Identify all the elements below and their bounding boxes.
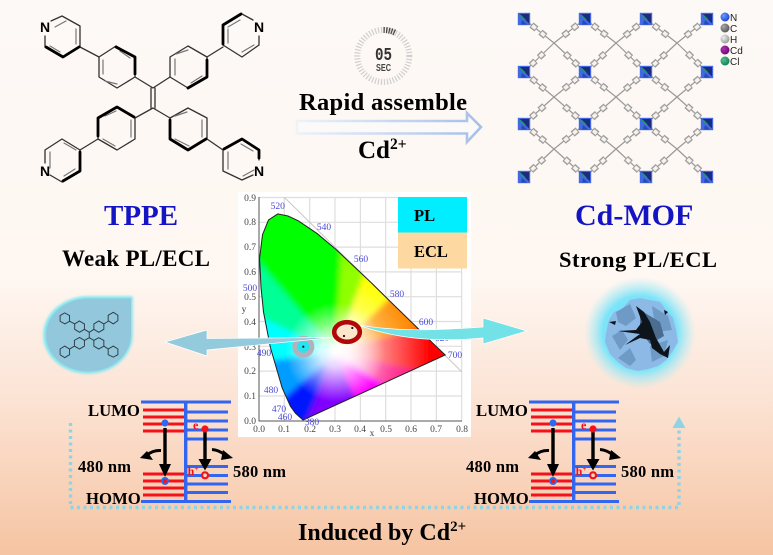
legend: atoms: N	[730, 13, 737, 24]
energy level diagram: Cd-MOF: HOMO	[474, 489, 529, 508]
label: Cd2+ reagent: 2+	[390, 136, 407, 153]
text: strong PL/ECL: Strong PL/ECL	[559, 247, 717, 272]
energy level diagram: Cd-MOF: e	[581, 418, 587, 432]
chart: x axis labels: 0.6	[405, 425, 417, 435]
chart: y axis labels: 0.3	[244, 343, 256, 353]
chart: x axis labels: 0.2	[304, 425, 316, 435]
legend: atoms: C	[730, 24, 737, 35]
icon: timer: 05	[375, 46, 392, 66]
icon: TPPE droplet	[44, 297, 132, 373]
chart: y axis labels: 0.8	[244, 218, 256, 228]
chart: x axis labels: x	[370, 429, 375, 439]
chart: y axis labels	[244, 194, 256, 427]
legend: ECL label: ECL	[414, 242, 448, 261]
caption: induced by Cd2+: Induced by Cd	[298, 520, 450, 546]
chart: x axis labels: 0.1	[278, 425, 290, 435]
energy level diagram: TPPE: +	[194, 465, 198, 473]
chart: wavelength labels: 500	[243, 284, 257, 294]
Cd-MOF framework	[518, 13, 713, 183]
chart: x axis labels: 0.4	[354, 425, 366, 435]
arrow: to Cd-MOF	[358, 318, 527, 344]
energy level diagram: TPPE	[78, 400, 286, 508]
chart: x axis labels	[242, 305, 468, 439]
label: Cd2+ reagent: Cd	[358, 137, 390, 164]
chart: wavelength labels: 540	[317, 223, 331, 233]
icon: timer: SEC	[376, 63, 391, 74]
arrow: to TPPE	[165, 330, 332, 356]
legend: PL label: PL	[414, 206, 435, 225]
legend: PL swatch	[398, 197, 467, 232]
TPPE molecule structure	[40, 14, 264, 182]
chart: wavelength labels: 480	[264, 386, 278, 396]
chart: x axis labels: 0.5	[380, 425, 392, 435]
TPPE molecule structure: N	[40, 163, 50, 179]
chart: x axis labels: 0.8	[456, 425, 468, 435]
energy level diagram: Cd-MOF	[466, 400, 674, 508]
heading: Cd-MOF: Cd-MOF	[575, 199, 693, 232]
energy level diagram: TPPE: 580 nm	[233, 462, 286, 481]
TPPE molecule structure: N	[40, 19, 50, 35]
chart: wavelength labels: 620	[435, 334, 449, 344]
energy level diagram: TPPE: HOMO	[86, 489, 141, 508]
icon: timer	[357, 30, 409, 82]
marker: grey ring TPPE	[295, 338, 312, 355]
chart: x axis labels: y	[242, 305, 247, 315]
chart: wavelength labels: 700	[448, 351, 462, 361]
chart: wavelength labels: 580	[390, 290, 404, 300]
chart: y axis labels: 0.4	[244, 318, 256, 328]
chart: y axis labels: 0.5	[244, 293, 256, 303]
legend: atoms: Cl	[730, 57, 739, 68]
chart: wavelength labels: 490	[257, 349, 271, 359]
chart: wavelength labels: 460	[278, 413, 292, 423]
caption: induced by Cd2+: 2+	[450, 519, 466, 535]
chart: y axis labels: 0.6	[244, 268, 256, 278]
energy level diagram: TPPE: LUMO	[88, 401, 140, 420]
heading: TPPE: TPPE	[104, 200, 178, 232]
legend: atoms: H	[730, 35, 737, 46]
chart: wavelength labels: 600	[419, 318, 433, 328]
chart: wavelength labels: 380	[305, 418, 319, 428]
chart: y axis labels: 0.9	[244, 194, 256, 204]
chart: x axis labels: 0.0	[253, 425, 265, 435]
chart: wavelength labels: 470	[272, 405, 286, 415]
energy level diagram: Cd-MOF: h	[576, 464, 582, 478]
TPPE molecule structure: N	[254, 163, 264, 179]
legend: atoms: Cd	[730, 46, 743, 57]
marker: red ring Cd-MOF	[334, 322, 360, 342]
chart: y axis labels: 0.2	[244, 367, 256, 377]
chart: y axis labels: 0.1	[244, 392, 256, 402]
energy level diagram: Cd-MOF: 580 nm	[621, 462, 674, 481]
energy level diagram: Cd-MOF: LUMO	[476, 401, 528, 420]
TPPE molecule structure: N	[254, 19, 264, 35]
legend: ECL swatch	[398, 232, 467, 268]
icon: Cd-MOF particle with glow	[584, 277, 696, 389]
arrow: rapid assemble	[297, 113, 481, 142]
legend: atoms	[720, 12, 743, 68]
chart: wavelength labels: 520	[271, 202, 285, 212]
chart: colour gamut	[260, 214, 444, 420]
heading: rapid assemble: Rapid assemble	[299, 89, 467, 116]
text: weak PL/ECL: Weak PL/ECL	[62, 246, 210, 271]
energy level diagram: TPPE: e	[193, 418, 199, 432]
chart: wavelength labels	[243, 202, 462, 428]
chart: x axis labels: 0.3	[329, 425, 341, 435]
energy level diagram: TPPE: 480 nm	[78, 457, 131, 476]
chart: y axis labels: 0.0	[244, 417, 256, 427]
chart: x axis labels: 0.7	[430, 425, 442, 435]
arrow: dotted induced path	[70, 416, 686, 508]
chart grid	[259, 197, 462, 421]
energy level diagram: Cd-MOF: 480 nm	[466, 457, 519, 476]
energy level diagram: Cd-MOF: +	[582, 465, 586, 473]
panel: CIE chromaticity chart	[238, 190, 471, 439]
chart: y axis labels: 0.7	[244, 243, 256, 253]
chart: wavelength labels: 560	[354, 255, 368, 265]
energy level diagram: TPPE: h	[188, 464, 194, 478]
